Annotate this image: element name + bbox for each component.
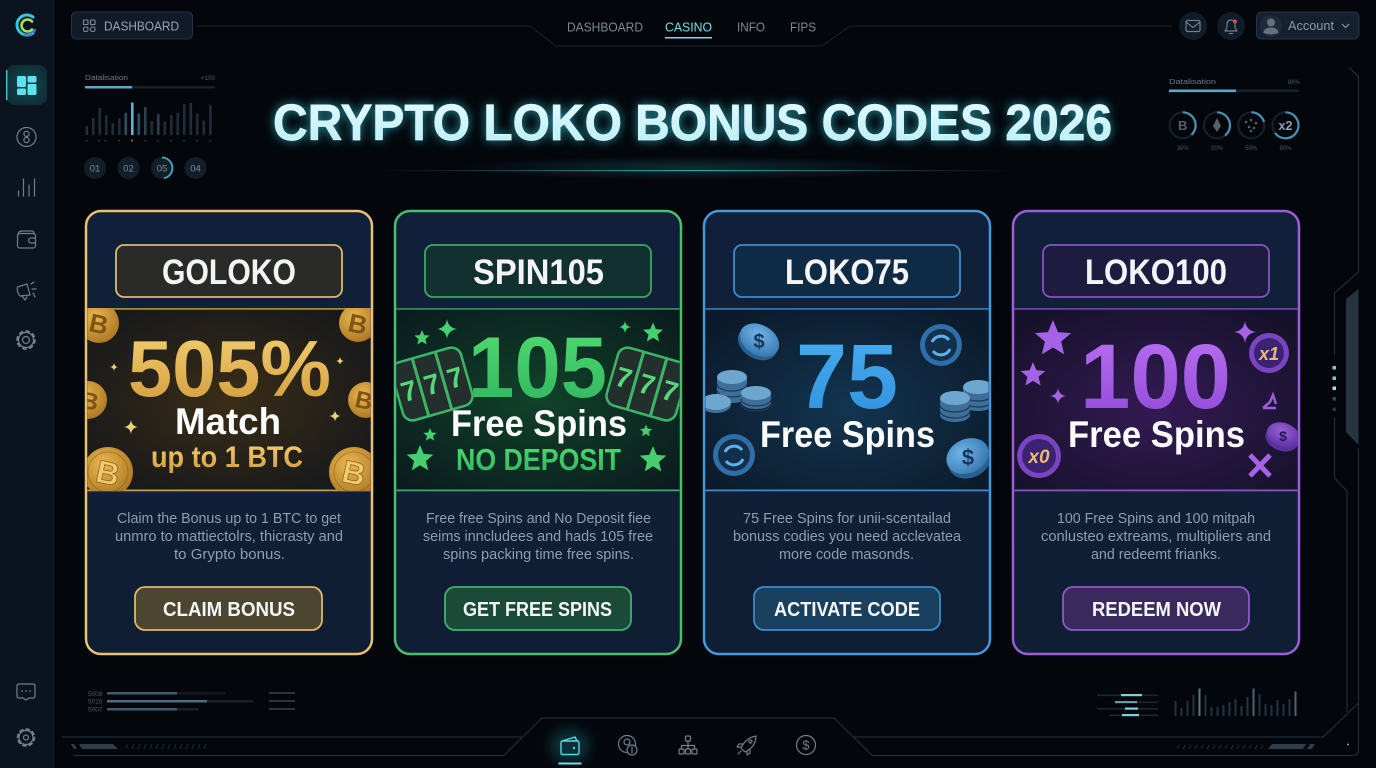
coins and stacks: $	[753, 331, 765, 353]
icon: coin chart	[618, 736, 637, 755]
icon: wallet	[18, 231, 36, 248]
coins and stacks	[706, 323, 988, 479]
nav links	[567, 20, 816, 38]
icon: chat	[17, 684, 35, 700]
mini bar chart	[86, 102, 212, 135]
step indicators: 04	[190, 164, 201, 174]
step indicators: 01	[90, 164, 100, 174]
step indicators	[84, 157, 206, 179]
banner: up to 1 BTC	[151, 441, 303, 474]
sparkles	[110, 357, 344, 434]
right data widget	[1169, 77, 1300, 152]
bitcoin coins: B	[339, 453, 369, 493]
right data widget: B	[1178, 118, 1187, 133]
button	[1063, 587, 1249, 630]
status strip left	[71, 744, 206, 749]
account button	[1256, 12, 1359, 39]
right data widget: 20%	[1211, 146, 1224, 152]
step indicators: 02	[123, 164, 134, 174]
bottom right stats	[1097, 688, 1296, 716]
icon: active wallet	[550, 728, 590, 764]
description	[115, 511, 343, 563]
bottom left stats	[88, 691, 295, 714]
code box	[116, 245, 342, 297]
banner: Free Spins	[451, 403, 627, 444]
slot reels: 7	[397, 374, 421, 408]
description: Claim the Bonus up to 1 BTC to get	[117, 511, 341, 527]
button	[135, 587, 322, 630]
bitcoin coins: B	[78, 387, 101, 417]
description	[423, 511, 653, 563]
icon: active dashboard tile	[6, 65, 47, 105]
icon: logo	[17, 15, 35, 35]
bitcoin coins	[88, 308, 370, 491]
banner: NO DEPOSIT	[456, 442, 621, 477]
right data widget: 50%	[1245, 146, 1258, 152]
card: LOKO75	[701, 211, 997, 654]
title	[273, 94, 1112, 180]
description: more code masonds.	[779, 547, 914, 563]
bottom left stats: 5008	[88, 691, 103, 698]
nav links: CASINO	[665, 20, 712, 34]
bottom navigation icons	[550, 728, 816, 764]
account button: Account	[1288, 18, 1334, 33]
description: to Grypto bonus.	[174, 547, 285, 563]
description: bonuss codies you need acclevatea	[733, 529, 962, 545]
banner: Free Spins	[760, 414, 935, 455]
bottom frame	[62, 703, 1358, 756]
slot reels	[389, 345, 690, 423]
code box: LOKO100	[1085, 253, 1227, 292]
bottom left stats: 5016	[88, 698, 103, 706]
bitcoin coins: B	[352, 386, 375, 416]
dashboard button	[72, 12, 192, 39]
icon: rocket	[737, 736, 756, 755]
description: seims inncludees and hads 105 free	[423, 529, 653, 545]
button	[754, 587, 940, 630]
description	[1041, 511, 1271, 563]
button: CLAIM BONUS	[163, 599, 295, 621]
banner	[389, 308, 690, 491]
headline: 105	[468, 320, 607, 416]
bitcoin coins: B	[345, 307, 370, 341]
stars	[407, 319, 666, 471]
code box	[1043, 245, 1269, 297]
icon: megaphone	[17, 282, 36, 300]
icon: coin	[17, 128, 36, 146]
coins and stacks: $	[962, 445, 974, 470]
dashboard button: DASHBOARD	[104, 18, 179, 34]
description	[733, 511, 962, 563]
right data widget: x2	[1279, 119, 1292, 133]
description: 75 Free Spins for unii-scentailad	[743, 511, 951, 527]
status strip right	[1177, 744, 1315, 749]
stars and chips: $	[1279, 428, 1287, 444]
right data widget: Datalisation	[1169, 77, 1216, 86]
headline: 75	[796, 326, 898, 428]
card: GOLOKO	[69, 211, 384, 654]
top navigation	[72, 12, 1359, 46]
stars and chips: x0	[1027, 447, 1050, 468]
code box: LOKO75	[785, 253, 909, 292]
icon: network	[679, 736, 697, 754]
step indicators: 05	[157, 164, 167, 174]
description: and redeemt frianks.	[1091, 547, 1221, 563]
code box: SPIN105	[473, 253, 604, 292]
icon: bars	[18, 179, 34, 196]
right data widget: 86%	[1288, 79, 1300, 86]
banner: Free Spins	[1068, 414, 1245, 455]
bitcoin coins: B	[93, 453, 123, 493]
button: GET FREE SPINS	[463, 599, 612, 621]
icon: dollar coin	[796, 736, 816, 754]
stars and chips: x1	[1258, 344, 1279, 364]
right frame decoration	[1332, 67, 1358, 750]
card: SPIN105	[389, 211, 690, 654]
stars and chips	[1017, 320, 1303, 478]
code box: GOLOKO	[162, 253, 296, 292]
button: ACTIVATE CODE	[774, 599, 920, 621]
icon: dollar coin: $	[803, 738, 810, 752]
slot reels: 7	[635, 367, 659, 402]
icon: mail	[1179, 12, 1207, 40]
nav links: FIPS	[790, 20, 816, 34]
slot reels: 7	[612, 361, 636, 395]
slot reels: 7	[658, 374, 682, 408]
title: CRYPTO LOKO BONUS CODES 2026	[273, 94, 1112, 151]
description: Free free Spins and No Deposit fiee	[426, 511, 651, 527]
icon: notification bell	[1217, 12, 1245, 40]
description: 100 Free Spins and 100 mitpah	[1057, 511, 1255, 527]
left data widget: Datalisation	[85, 73, 128, 82]
icon: settings gear	[17, 331, 35, 349]
banner: Match	[175, 401, 281, 442]
code box	[734, 245, 960, 297]
progress rings	[1170, 112, 1298, 138]
description: conlusteo extreams, multipliers and	[1041, 529, 1271, 545]
slot reels: 7	[420, 367, 444, 402]
code box	[425, 245, 651, 297]
description: unmro to mattiectolrs, thicrasty and	[115, 529, 343, 545]
bottom left stats: 5007	[88, 706, 103, 714]
nav links: DASHBOARD	[567, 20, 643, 34]
left data widget: +100	[201, 76, 216, 82]
sidebar	[0, 0, 54, 768]
left data widget	[84, 73, 216, 179]
nav links: INFO	[737, 20, 765, 34]
button	[445, 587, 631, 630]
card: LOKO100	[1013, 211, 1303, 654]
banner	[1014, 308, 1303, 491]
right data widget: 30%	[1177, 146, 1189, 152]
banner	[88, 308, 370, 492]
slot reels: 7	[443, 361, 467, 395]
icon: footer gear	[18, 729, 34, 746]
bitcoin coins: B	[86, 307, 111, 341]
banner	[701, 308, 997, 491]
right data widget: 90%	[1279, 146, 1292, 152]
headline: 100	[1080, 326, 1231, 428]
headline: 505%	[128, 324, 331, 413]
description: spins packing time free spins.	[443, 547, 634, 563]
button: REDEEM NOW	[1092, 599, 1221, 621]
